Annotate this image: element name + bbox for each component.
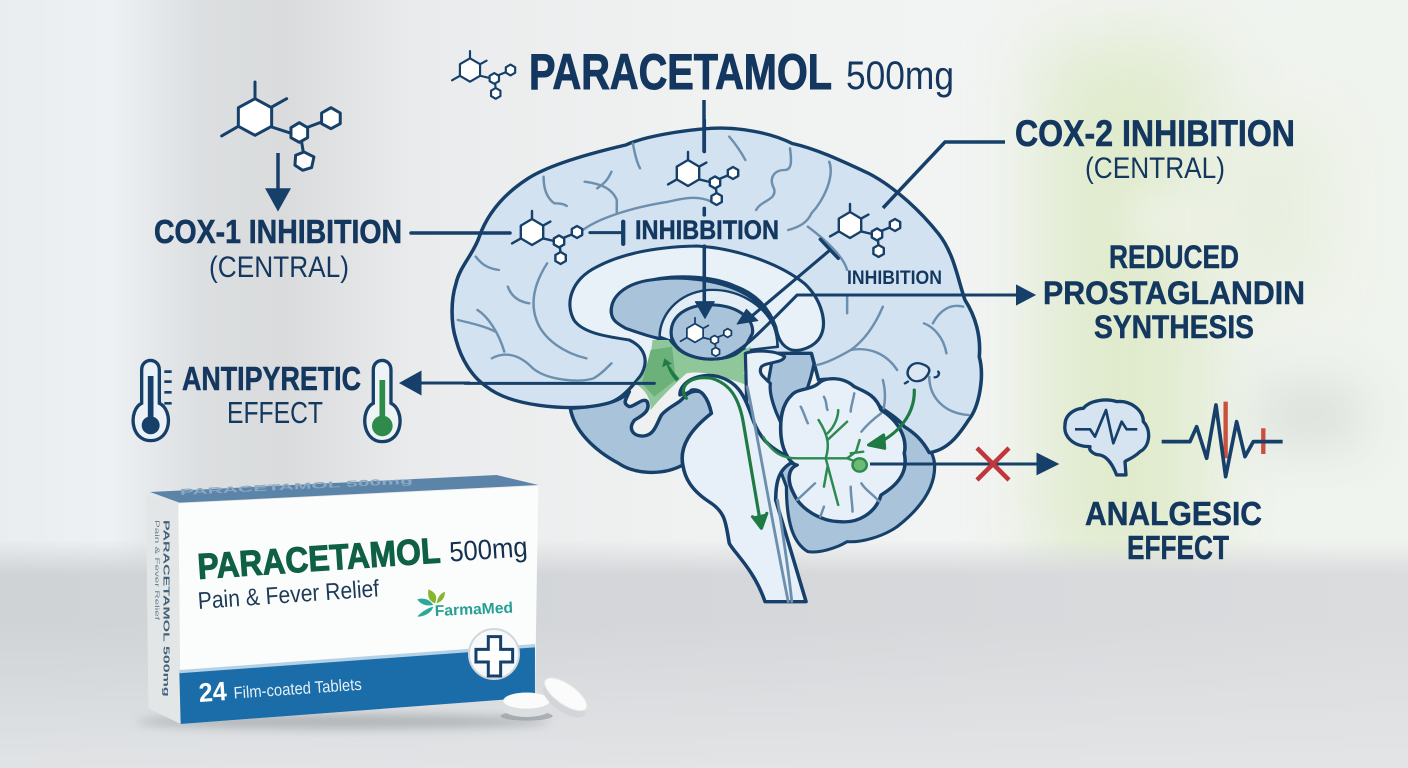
molecule near title [452, 51, 515, 99]
arrow: title to brain [702, 100, 706, 152]
green hypothalamus [635, 340, 751, 410]
title: PARACETAMOL [529, 44, 832, 100]
box shadow [137, 714, 550, 729]
dashed connector [699, 120, 709, 215]
inhibition label right: INHIBITION [847, 268, 942, 289]
antipyretic arrow [402, 373, 470, 393]
panel: medicine box [137, 475, 594, 729]
COX-1 inhibit T-bar [590, 222, 623, 244]
COX-2 heading: COX-2 INHIBITION [1015, 113, 1295, 154]
reduced prostaglandin text: SYNTHESIS [1094, 309, 1254, 345]
COX-2 connector [883, 142, 1005, 208]
COX-2 heading: (CENTRAL) [1085, 152, 1225, 185]
analgesic text: ANALGESIC [1085, 495, 1262, 532]
icon: thermometer green [365, 360, 400, 442]
analgesic text: EFFECT [1127, 529, 1229, 566]
molecule in brain left [512, 211, 582, 264]
inhibition label centre: INHIBBITION [635, 215, 779, 245]
cerebellar folds [797, 393, 881, 517]
antipyretic text: ANTIPYRETIC [182, 360, 361, 397]
icon: brain with pulse [1065, 400, 1149, 475]
green node [852, 458, 867, 472]
box name: PARACETAMOL [196, 530, 442, 587]
green arrow from receptor [869, 390, 914, 448]
spinal canal lines [747, 387, 792, 602]
path line to prostaglandin [672, 295, 1022, 359]
inhibition T-bar arrow [737, 239, 838, 324]
reduced prostaglandin text [1043, 239, 1305, 345]
blue band [179, 646, 535, 724]
antipyretic text [182, 360, 361, 430]
icon: red cross [977, 448, 1009, 480]
tablets [501, 672, 594, 724]
analgesic text [1085, 495, 1262, 566]
arrow: molecule down to COX-1 [268, 153, 288, 208]
green cerebellar pathway [763, 410, 863, 505]
cerebrum outline [452, 128, 981, 453]
icon: thermometer cold [133, 360, 172, 441]
tablet text: Film-coated Tablets [233, 675, 362, 703]
title: 500mg [846, 54, 954, 98]
icon: FarmaMed leaves [417, 589, 445, 617]
line from antipyretic [465, 379, 654, 388]
receptor ring [905, 363, 939, 383]
molecule in thalamus [680, 318, 731, 356]
antipyretic text: EFFECT [227, 395, 323, 430]
band highlight [179, 644, 535, 673]
molecule in brain top [668, 152, 738, 205]
COX-1 connector [411, 231, 510, 235]
reduced prostaglandin text: PROSTAGLANDIN [1043, 275, 1305, 311]
corpus callosum [570, 246, 823, 377]
back dark region around cerebellum [761, 340, 935, 552]
COX-1 heading [154, 213, 402, 284]
icon: medical cross [469, 629, 519, 679]
molecule above COX-1 [222, 82, 340, 170]
box side [146, 495, 181, 724]
cerebellum [781, 379, 905, 522]
box front [178, 486, 538, 724]
brainstem and spinal cord [680, 375, 806, 602]
panel: brain diagram [452, 120, 1022, 602]
box side subtext: Pain & Fever Relief [153, 520, 160, 620]
molecule in brain right [830, 204, 900, 257]
reduced prostaglandin text: REDUCED [1109, 239, 1239, 275]
COX-1 heading: COX-1 INHIBITION [154, 213, 402, 250]
box top [150, 475, 538, 503]
box dose: 500mg [448, 531, 529, 568]
analgesic arrow with block [870, 455, 1056, 473]
white fornix arc [660, 290, 777, 350]
icon: pain pulse [1162, 402, 1283, 477]
green descending pathway arrow [684, 378, 767, 528]
COX-1 heading: (CENTRAL) [209, 251, 349, 284]
small green arrow [662, 358, 679, 382]
frontal lower lobe [570, 391, 711, 472]
box subtitle: Pain & Fever Relief [197, 575, 380, 615]
FarmaMed name: FarmaMed [434, 600, 513, 620]
COX-2 heading [1015, 113, 1295, 185]
tablet count: 24 [198, 676, 228, 708]
inner dark arc [611, 278, 777, 350]
oval thalamus [671, 305, 753, 359]
arrow: inhibition down to thalamus [695, 246, 714, 318]
cortical folds [458, 137, 969, 415]
box top text: PARACETAMOL 500mg [180, 476, 413, 497]
pons white band [745, 351, 799, 463]
box side text: PARACETAMOL 500mg [161, 520, 170, 697]
reduced prostaglandin arrow [1017, 286, 1034, 304]
